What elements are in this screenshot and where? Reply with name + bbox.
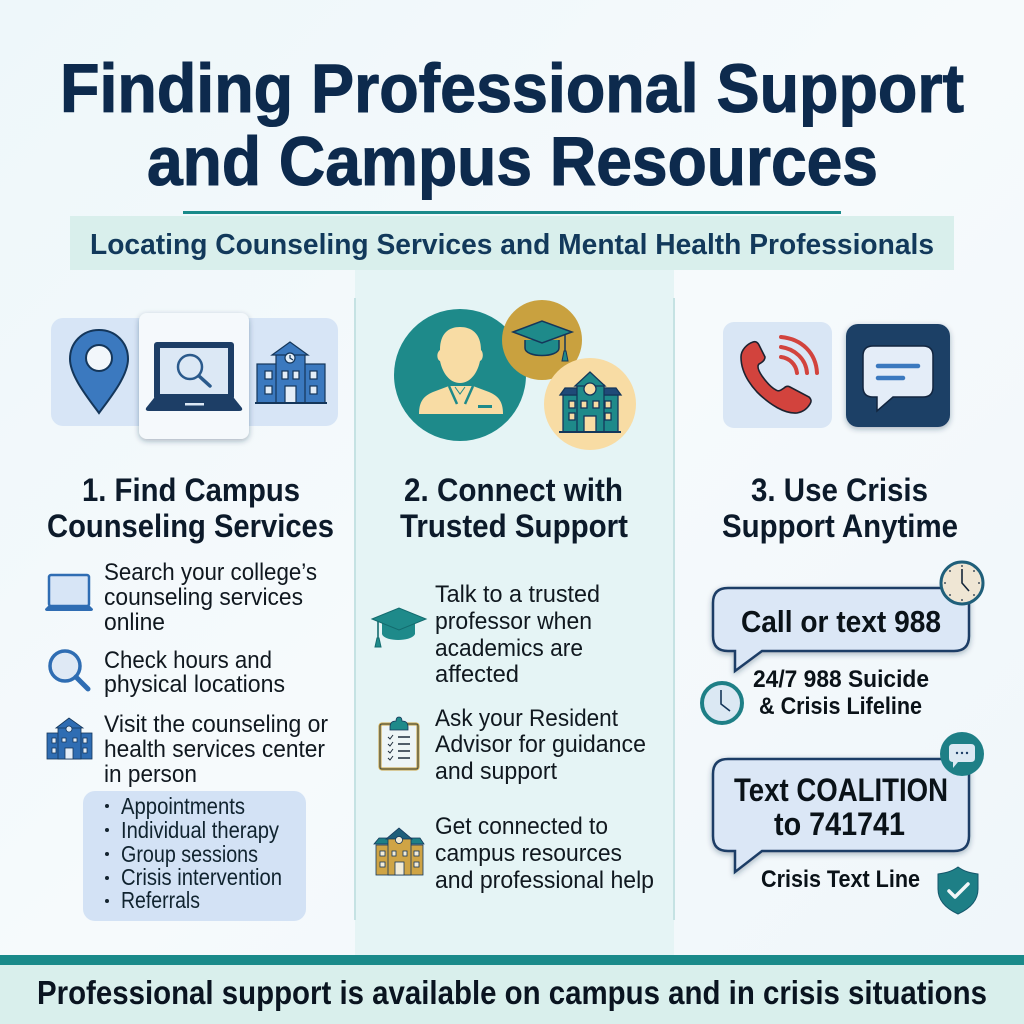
text: talk to professor: Talk to a trusted [435, 581, 600, 608]
title: and Campus Resources [147, 123, 878, 200]
panel: services list: Group sessions [121, 841, 258, 867]
text: visit center: Visit the counseling or [104, 711, 328, 738]
text: 988 lifeline: & Crisis Lifeline [759, 693, 922, 720]
icon: campus building badge [544, 358, 636, 450]
text: search online: Search your college’s [104, 559, 317, 586]
text: check hours: physical locations [104, 671, 285, 698]
icon: advisor person [394, 309, 526, 441]
panel: services list: Appointments [121, 793, 245, 819]
panel: services list: Referrals [121, 887, 200, 913]
text: resident advisor: Advisor for guidance [435, 731, 646, 758]
text: search online: counseling services [104, 584, 303, 611]
panel: column 1 icons [51, 313, 338, 439]
panel: column 2 icons [394, 300, 636, 450]
text: talk to professor [435, 581, 600, 688]
panel: services list: Crisis intervention [121, 864, 282, 890]
panel: middle column background [354, 270, 675, 955]
text: check hours [104, 647, 285, 698]
text: resident advisor: and support [435, 758, 557, 785]
icon: small magnifier [50, 651, 88, 689]
text: talk to professor: professor when [435, 608, 592, 635]
heading: step 1 [47, 472, 334, 544]
subtitle band: Locating Counseling Services and Mental Health Professionals [90, 229, 934, 261]
text: search online [104, 559, 317, 636]
panel: services list [83, 791, 306, 921]
text: campus resources: campus resources [435, 840, 622, 867]
icon: small graduation cap [372, 608, 426, 647]
text: talk to professor: affected [435, 661, 519, 688]
text: crisis text line: Crisis Text Line [761, 866, 920, 893]
footer banner [0, 955, 1024, 1024]
text: visit center: health services center [104, 736, 325, 763]
panel: services list: Individual therapy [121, 817, 279, 843]
text: check hours: Check hours and [104, 647, 272, 674]
text: visit center [104, 711, 328, 788]
heading: step 3: Support Anytime [722, 508, 958, 544]
callout: text coalition [713, 732, 984, 872]
icon: wall clock [941, 562, 983, 604]
text: talk to professor: academics are [435, 635, 583, 662]
title: Finding Professional Support [60, 50, 964, 127]
heading: step 2: Trusted Support [400, 508, 628, 544]
title [60, 50, 964, 200]
text: 988 lifeline: 24/7 988 Suicide [753, 666, 929, 693]
icon: chat message tile [846, 324, 950, 427]
icon: campus building [255, 342, 327, 403]
text: search online: online [104, 609, 165, 636]
text: campus resources: and professional help [435, 867, 654, 894]
icon: shield check [938, 867, 978, 914]
text: resident advisor: Ask your Resident [435, 705, 618, 732]
icon: graduation cap badge [502, 300, 582, 380]
icon: map pin [70, 330, 128, 413]
icon: small building [47, 718, 92, 759]
icon: clipboard checklist [380, 717, 418, 769]
callout: text coalition: Text COALITION [734, 772, 948, 808]
panel: column 3 icons [723, 322, 950, 428]
text: visit center: in person [104, 761, 197, 788]
icon: laptop with magnifier card [139, 313, 249, 439]
icon: teal clock [702, 683, 742, 723]
heading: step 2: 2. Connect with [404, 472, 623, 508]
icon: chat badge [940, 732, 984, 776]
callout: call or text 988 [713, 562, 983, 671]
text: campus resources: Get connected to [435, 813, 608, 840]
callout: text coalition: to 741741 [774, 806, 905, 842]
text: resident advisor [435, 705, 646, 785]
heading: step 1: Counseling Services [47, 508, 334, 544]
icon: small laptop [45, 575, 93, 611]
callout: call or text 988: Call or text 988 [741, 604, 941, 639]
text: 988 lifeline [753, 666, 929, 720]
subtitle band [70, 211, 954, 270]
icon: phone with signal [723, 322, 832, 428]
heading: step 3 [722, 472, 958, 544]
heading: step 3: 3. Use Crisis [751, 472, 928, 508]
heading: step 1: 1. Find Campus [82, 472, 300, 508]
icon: gold building [374, 828, 424, 875]
text: campus resources [435, 813, 654, 894]
heading: step 2 [400, 472, 628, 544]
